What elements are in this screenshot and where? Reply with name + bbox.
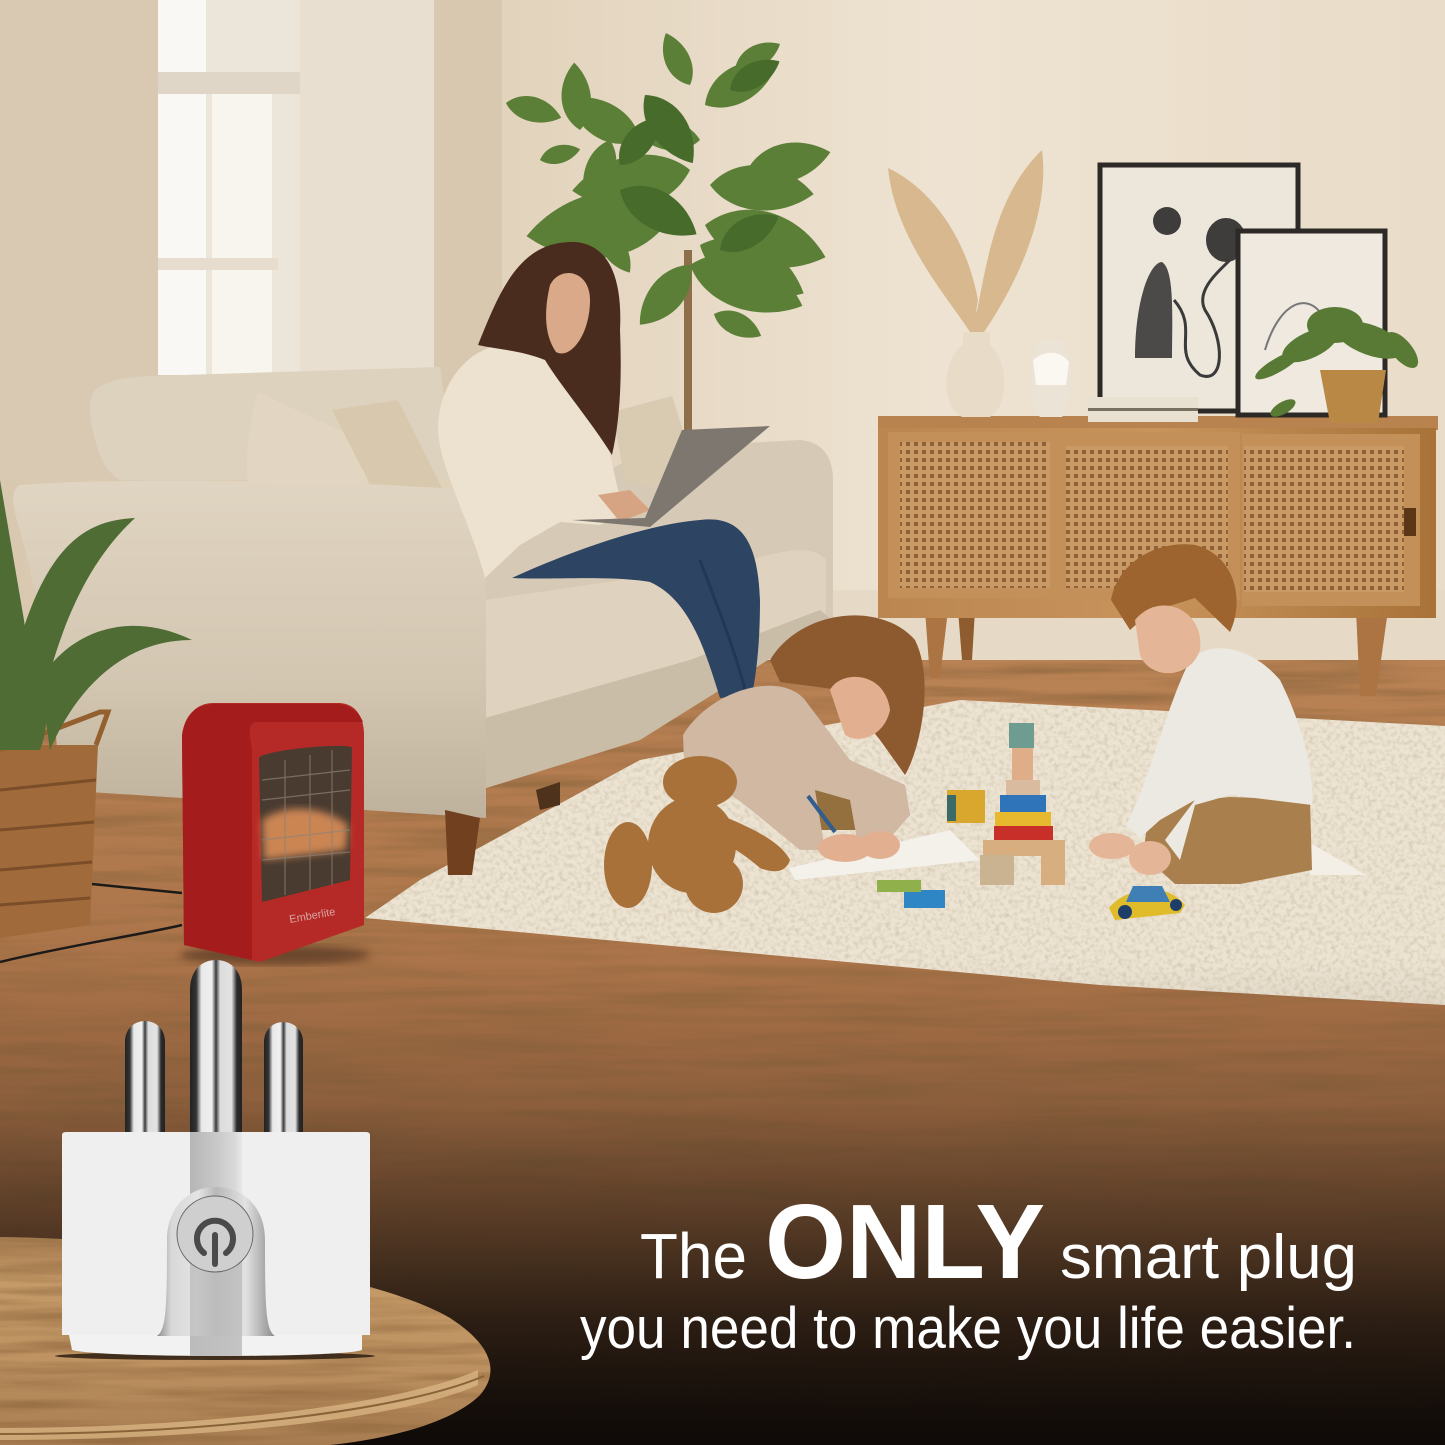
plug base ring bbox=[68, 1330, 362, 1356]
floor bbox=[0, 660, 1445, 1445]
power button bbox=[177, 1196, 253, 1272]
cable bbox=[0, 884, 182, 962]
boy playing bbox=[1089, 544, 1366, 884]
smart plug product bbox=[55, 960, 375, 1360]
background: wall and window bbox=[0, 0, 1445, 720]
round wooden table bbox=[0, 1230, 500, 1445]
earth pin bbox=[190, 960, 242, 1132]
silver band bbox=[190, 1132, 242, 1356]
cushions bbox=[247, 392, 686, 488]
left pin bbox=[125, 1021, 165, 1132]
woman with laptop bbox=[438, 242, 770, 698]
headline: you need to make you life easier. bbox=[580, 1296, 1356, 1361]
left potted plant and basket bbox=[0, 480, 192, 938]
potted plant on sideboard bbox=[1252, 307, 1424, 423]
headline: smart plug bbox=[1060, 1223, 1357, 1292]
button housing bbox=[157, 1187, 275, 1336]
headline bbox=[580, 1183, 1357, 1361]
plant: tall fig tree bbox=[503, 28, 835, 440]
red heater: Emberlite bbox=[288, 906, 336, 926]
sideboard with cane doors bbox=[878, 416, 1438, 696]
framed art bbox=[1100, 165, 1385, 415]
rug bbox=[365, 700, 1445, 1005]
plug shadow bbox=[55, 1352, 375, 1360]
teddy bear bbox=[604, 756, 790, 913]
headline: ONLY bbox=[765, 1183, 1045, 1301]
plug body bbox=[62, 1132, 370, 1335]
red heater bbox=[180, 703, 370, 965]
right pin bbox=[264, 1022, 303, 1132]
sofa bbox=[13, 367, 833, 875]
headline: The bbox=[640, 1220, 747, 1292]
vases and pampas bbox=[888, 150, 1198, 422]
bottom dark gradient bbox=[0, 960, 1445, 1445]
girl drawing bbox=[683, 615, 980, 880]
toy blocks and car bbox=[877, 723, 1185, 920]
